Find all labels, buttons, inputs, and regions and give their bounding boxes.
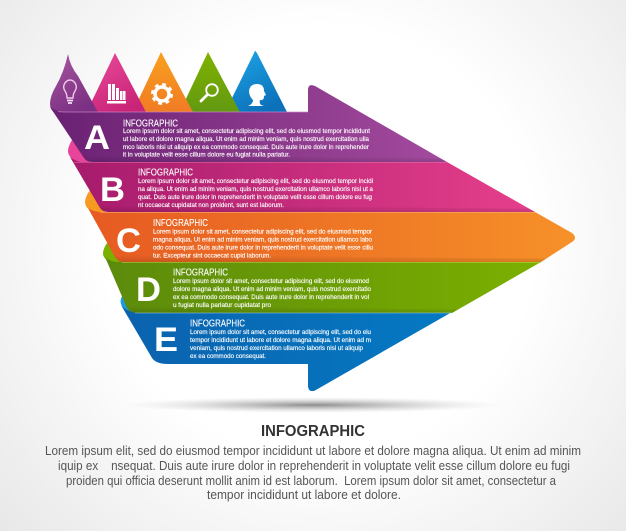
band D: green (103, 243, 541, 313)
footer description: tempor incididunt ut labore et dolore. (207, 488, 401, 502)
text E: tempor incididunt ut labore et dolore magna aliqua. Ut enim ad m (190, 337, 371, 344)
text C: INFOGRAPHIC (153, 217, 208, 229)
band B: pink (68, 140, 535, 212)
text D: INFOGRAPHIC (173, 266, 228, 278)
text C: odo consequat. Duis aute irure dolor in reprehenderit in voluptate velit esse cillu (153, 244, 373, 252)
text B: quat. Duis aute irure dolor in reprehenderit in voluptate velit esse cillum dolore eu fug (138, 194, 372, 201)
text E: INFOGRAPHIC (190, 318, 245, 330)
text C: C (116, 222, 141, 260)
text D: Lorem ipsum dolor sit amet, consectetur adipiscing elit, sed do eiusmod (173, 278, 369, 285)
footer description: proiden qui officia deserunt mollit anim id est laborum. Lorem ipsum dolor sit amet, consectetur a (66, 474, 556, 488)
text E (154, 318, 371, 360)
text B: B (100, 171, 125, 209)
arrow floor shadow (123, 397, 503, 413)
text B: INFOGRAPHIC (138, 166, 193, 178)
icon: light bulb (64, 80, 76, 103)
text C: Lorem ipsum dolor sit amet, consectetur adipiscing elit, sed do eiusmod tempor (153, 228, 373, 236)
text A: ut labore et dolore magna aliqua. Ut enim ad minim veniam, quis nostrud exercitation ulla (123, 136, 369, 143)
text B: nt occaecat cupidatat non proident, sunt est laborum. (138, 202, 284, 209)
band E: blue arrow lower barb (121, 292, 452, 391)
text E: veniam, quis nostrud exercitation ullamco laboris nisi ut aliquip (190, 345, 363, 352)
text C: tur. Excepteur sint occaecat cupid laborum. (153, 252, 271, 260)
text E: ex ea commodo consequat. (190, 353, 266, 360)
band C: orange arrow tip (85, 190, 575, 262)
text A: INFOGRAPHIC (123, 118, 178, 130)
text A: Lorem ipsum dolor sit amet, consectetur adipiscing elit, sed do eiusmod tempor incididunt (123, 128, 370, 135)
footer description: iquip ex nsequat. Duis aute irure dolor in reprehenderit in voluptate velit esse cillum dolore eu fugi (58, 459, 570, 473)
text B (100, 166, 373, 209)
text D: u fugiat nulla pariatur cupidatat pro (173, 302, 271, 309)
text D: dolore magna aliqua. Ut enim ad minim veniam, quis nostrud exercitatio (173, 286, 371, 293)
icon: head silhouette (248, 84, 266, 106)
text E: E (154, 321, 178, 359)
text A: A (84, 119, 110, 157)
footer description (45, 444, 581, 502)
text D: ex ea commodo consequat. Duis aute irure dolor in reprehenderit in vol (173, 294, 370, 301)
text D (136, 266, 371, 309)
icon: magnifier (201, 84, 218, 101)
footer description: Lorem ipsum elit, sed do eiusmod tempor incididunt ut labore et dolore magna aliqua. Ut enim ad minim (45, 444, 581, 458)
icon: bar chart (107, 84, 126, 104)
text B: Lorem ipsum dolor sit amet, consectetur adipiscing elit, sed do eiusmod tempor incidi (138, 178, 373, 185)
text E: Lorem ipsum dolor sit amet, consectetur adipiscing elit, sed do eiu (190, 329, 371, 336)
footer title: INFOGRAPHIC (261, 423, 365, 440)
icon: gear (152, 84, 172, 104)
band A: purple arrow upper barb (50, 85, 447, 162)
text C: magna aliqua. Ut enim ad minim veniam, quis nostrud exercitation ullamco labo (153, 236, 372, 244)
tabs: coloured icon drops (50, 51, 288, 114)
text D: D (136, 271, 161, 309)
text A: mco laboris nisi ut aliquip ex ea commodo consequat. Duis aute irure dolor in reprehender (123, 144, 370, 151)
text B: na aliqua. Ut enim ad minim veniam, quis nostrud exercitation ullamco laboris nisi ut a (138, 186, 373, 193)
text C (116, 217, 373, 260)
text A (84, 118, 370, 158)
text A: it in voluptate velit esse cillum dolore eu fugiat nulla pariatur. (123, 152, 290, 158)
